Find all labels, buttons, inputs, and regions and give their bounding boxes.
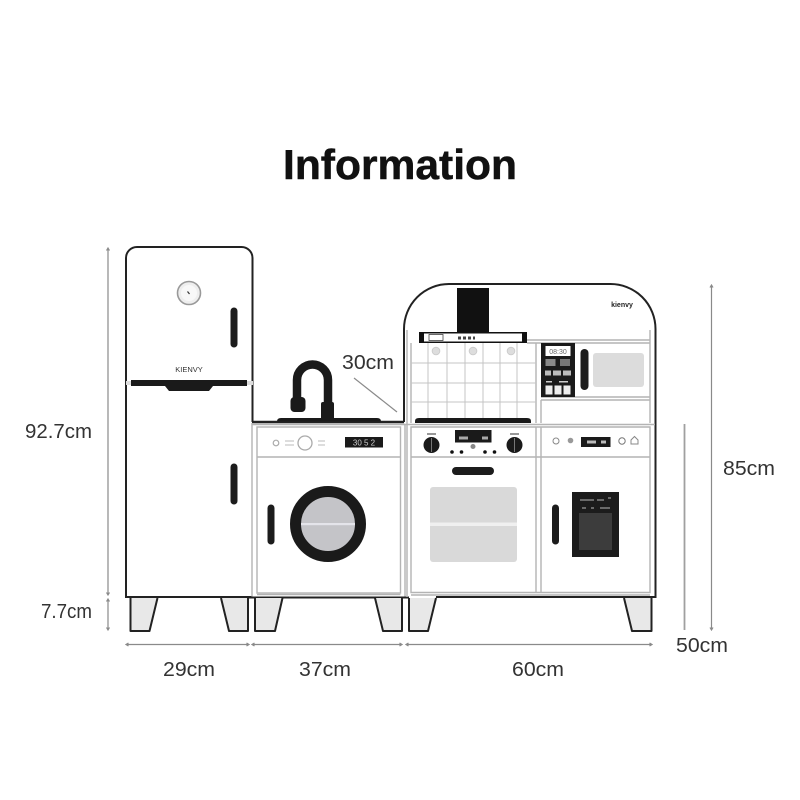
dimension: 7.7cm: 7.7cm	[41, 601, 92, 623]
range outline	[404, 284, 656, 597]
dimension: 85cm: 85cm	[723, 458, 775, 480]
brand label: kienvy	[611, 302, 633, 309]
panel: sink and washing machine	[248, 364, 409, 631]
dimension: 30cm depth arrow	[342, 352, 397, 412]
upper fridge handle	[230, 311, 238, 344]
dimension: 37cm	[252, 643, 402, 681]
microwave controls	[541, 343, 575, 397]
left range leg	[409, 598, 436, 631]
freezer divider	[126, 380, 253, 391]
microwave handle	[580, 353, 588, 386]
sink basin	[277, 418, 381, 422]
dimension: 92.7cm: 92.7cm	[25, 421, 92, 443]
dimension: 60cm	[406, 643, 652, 681]
microwave controls: 08:30	[549, 349, 567, 356]
washer frame	[252, 423, 405, 597]
washer door	[296, 492, 360, 556]
washer control panel	[273, 436, 383, 450]
title: Information	[283, 141, 517, 188]
panel: stove and cupboard unit	[404, 284, 656, 631]
washer control panel: 30 5 2	[353, 438, 376, 448]
washer handle	[268, 508, 274, 541]
cupboard control panel	[553, 436, 638, 447]
brand label: KIENVY	[175, 365, 203, 374]
right range leg	[624, 598, 652, 631]
counter line	[252, 421, 404, 423]
panel: refrigerator	[126, 247, 253, 631]
oven handle	[456, 467, 490, 475]
dimension: 37cm: 37cm	[299, 659, 351, 681]
dimension: 7.7cm	[41, 599, 110, 630]
microwave window	[593, 353, 644, 387]
fridge body outline	[126, 247, 252, 597]
cupboard handle	[552, 508, 559, 541]
dimension: 30cm depth arrow: 30cm	[342, 352, 394, 374]
faucet	[290, 364, 334, 420]
clock	[178, 282, 200, 304]
tile backsplash	[411, 343, 536, 418]
dimension: 85cm	[710, 285, 775, 630]
left washer leg	[255, 598, 282, 631]
dimension: 29cm: 29cm	[163, 659, 215, 681]
dimension: 29cm	[126, 643, 249, 681]
lower fridge handle	[230, 467, 238, 501]
left fridge leg	[130, 598, 158, 631]
right washer leg	[375, 598, 402, 631]
dimension: 92.7cm	[25, 248, 110, 595]
dimension: 50cm: 50cm	[676, 635, 728, 657]
range hood	[419, 288, 527, 343]
oven window	[430, 487, 517, 562]
range frame	[404, 330, 655, 597]
right fridge leg	[221, 598, 248, 631]
cupboard door panel	[572, 492, 619, 557]
washer base line	[248, 596, 409, 598]
cooktop	[415, 418, 531, 423]
dimension: 60cm: 60cm	[512, 659, 564, 681]
stove control panel	[424, 430, 522, 454]
